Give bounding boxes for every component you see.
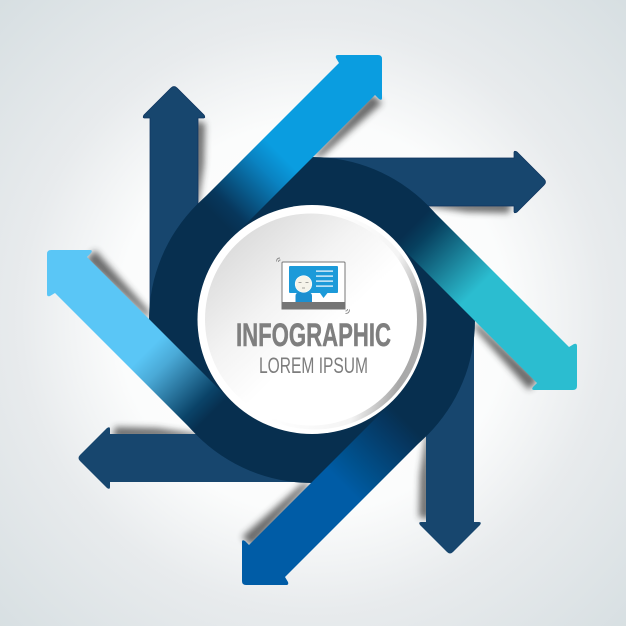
central white circle [198,205,426,434]
dark central ring [149,157,475,483]
diagonal arrow: teal, down-right [393,205,577,390]
grey crescent [206,212,424,430]
corner marks [276,258,350,314]
icon: presenter screen with speech bubble [276,258,350,314]
straight arrow: down [419,320,481,554]
drop shadows of straight arrows [113,121,511,519]
diagonal arrow: blue, down-left [242,401,427,585]
inner disc [205,214,417,426]
person body [296,292,312,302]
straight arrow: right [312,151,546,213]
diagonal arrow: light blue, up-left [47,250,231,435]
bubble text lines [316,270,333,287]
drop shadows of diagonal arrows [86,94,538,546]
outer white rim [198,205,426,434]
title: INFOGRAPHIC: INFOGRAPHIC [236,317,391,353]
straight arrow: up [143,86,205,320]
screen frame [282,262,345,309]
subtitle: LOREM IPSUM: LOREM IPSUM [259,353,368,378]
straight arrow: left [78,427,312,489]
person head [295,276,312,292]
speech bubble [289,266,338,298]
diagonal arrow: sky blue, up-right [197,55,382,239]
screen bottom bar [282,302,346,310]
